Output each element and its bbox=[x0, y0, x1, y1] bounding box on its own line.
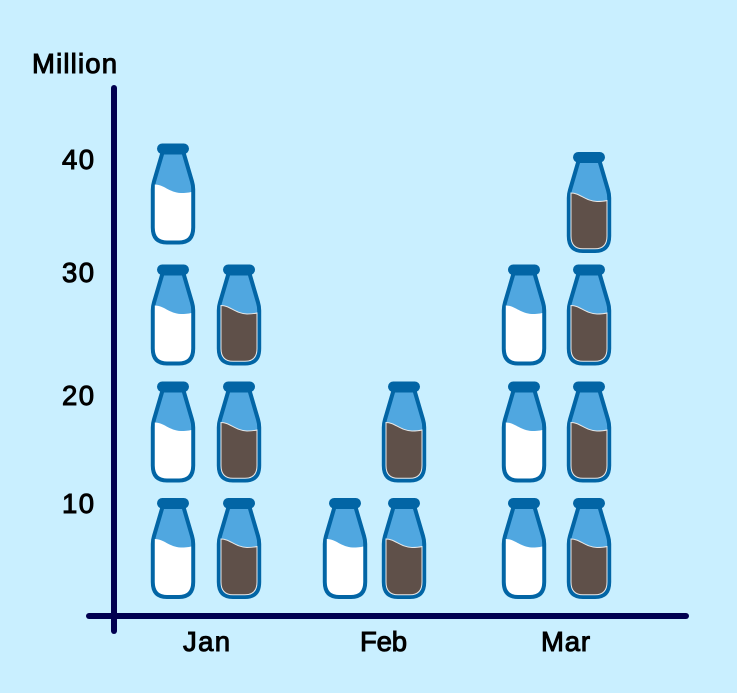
x axis month labels: Jan bbox=[183, 626, 230, 657]
Feb milk bottle bbox=[325, 498, 365, 597]
y axis tick labels: 40 bbox=[62, 144, 94, 175]
Jan milk bottles bbox=[153, 144, 193, 597]
x axis month labels: Mar bbox=[541, 626, 590, 657]
y axis unit label: Million bbox=[32, 48, 117, 79]
Jan chocolate milk bottles bbox=[219, 264, 259, 597]
x axis bbox=[89, 613, 686, 619]
y axis tick labels: 20 bbox=[62, 380, 94, 411]
y axis tick labels: 10 bbox=[62, 488, 94, 519]
y axis tick labels bbox=[62, 144, 94, 519]
x axis month labels: Feb bbox=[360, 626, 407, 657]
Feb chocolate milk bottles bbox=[384, 382, 424, 597]
y axis bbox=[111, 88, 117, 631]
Mar chocolate milk bottles bbox=[569, 152, 609, 597]
Mar milk bottles bbox=[504, 264, 544, 597]
y axis tick labels: 30 bbox=[62, 257, 94, 288]
x axis month labels bbox=[183, 626, 590, 657]
